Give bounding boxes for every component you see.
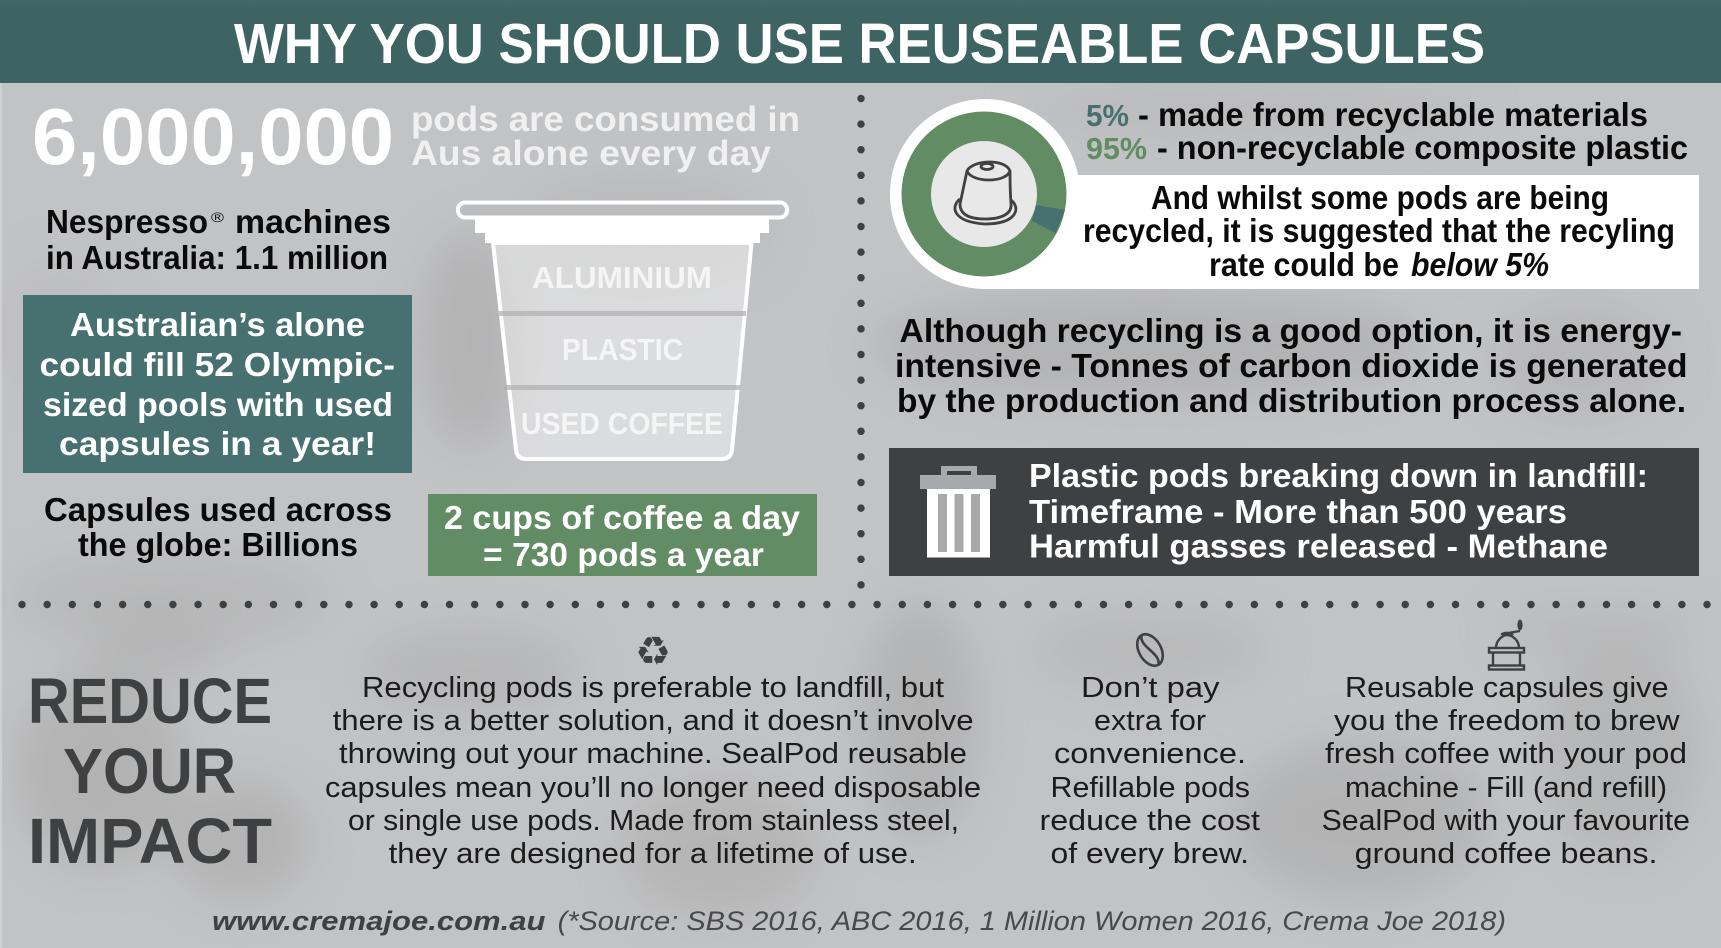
stat: 6,000,000 pods: Aus alone every day — [411, 134, 772, 173]
text: freedom column — [1322, 672, 1690, 870]
footer: source line — [212, 906, 1506, 936]
panel: recycling callout — [890, 96, 1699, 289]
panel: Olympic pools: Australian’s alone — [70, 306, 365, 343]
donut chart — [890, 99, 1080, 289]
diagram: capsule cross-section — [458, 202, 787, 459]
callout text: below 5% — [1411, 246, 1549, 283]
title: WHY YOU SHOULD USE REUSEABLE CAPSULES — [234, 12, 1485, 76]
panel: Olympic pools: capsules in a year! — [59, 425, 376, 462]
text: Nespresso machines: ® — [211, 209, 225, 225]
text: Nespresso machines: machines — [235, 203, 391, 240]
icon: coffee bean — [1132, 630, 1168, 670]
text: capsules globally: the globe: Billions — [78, 526, 358, 563]
label: aluminium: ALUMINIUM — [532, 260, 712, 295]
heading: reduce your impact: REDUCE — [28, 665, 272, 737]
layer dividers — [499, 311, 746, 390]
text: convenience column — [1040, 672, 1260, 870]
callout text — [1083, 179, 1675, 283]
callout text: rate could be — [1209, 246, 1399, 283]
text: recycling column: or single use pods. Made from stainless steel, — [348, 805, 959, 837]
text: Nespresso machines — [46, 203, 391, 276]
text: recycling column: they are designed for a lifetime of use. — [389, 838, 917, 870]
text: convenience column: Don’t pay — [1081, 672, 1220, 704]
icon: coffee grinder — [1489, 620, 1524, 670]
dotted divider: vertical — [857, 98, 865, 586]
title banner — [0, 0, 1721, 83]
text: recycling column: Recycling pods is preferable to landfill, but — [362, 672, 944, 704]
panel: 730 pods a year: 2 cups of coffee a day — [444, 499, 801, 536]
text: Nespresso machines: Nespresso — [46, 203, 208, 240]
text: energy-intensive recycling: Although recycling is a good option, it is energy- — [900, 312, 1682, 349]
icon: rubbish bin — [920, 466, 996, 558]
text: energy-intensive recycling — [895, 312, 1688, 419]
stat: 6,000,000 pods — [32, 92, 800, 181]
text: convenience column: Refillable pods — [1050, 772, 1250, 804]
callout text: And whilst some pods are being — [1151, 179, 1609, 216]
text: capsules globally: Capsules used across — [44, 491, 392, 528]
text: recycling column: throwing out your machine. SealPod reusable — [339, 738, 967, 770]
text: energy-intensive recycling: intensive - Tonnes of carbon dioxide is generated — [895, 347, 1688, 384]
text: freedom column: SealPod with your favourite — [1322, 805, 1690, 837]
panel: landfill: Plastic pods breaking down in landfill: — [1029, 457, 1648, 494]
capsule rim — [458, 202, 787, 218]
text: freedom column: fresh coffee with your pod — [1325, 738, 1687, 770]
stat: 6,000,000 pods: 6,000,000 — [32, 92, 394, 181]
dotted divider: horizontal — [22, 601, 1712, 608]
heading: reduce your impact — [28, 665, 272, 877]
text: recycling column: capsules mean you’ll no longer need disposable — [325, 772, 981, 804]
panel: Olympic pools — [23, 295, 412, 473]
text: recycling column — [325, 672, 981, 870]
capsule collar — [475, 217, 769, 243]
text: convenience column: convenience. — [1054, 738, 1246, 770]
panel: 730 pods a year: = 730 pods a year — [483, 536, 764, 573]
text: convenience column: of every brew. — [1050, 838, 1249, 870]
text: freedom column: Reusable capsules give — [1345, 672, 1668, 704]
text: convenience column: extra for — [1094, 705, 1206, 737]
panel: 730 pods a year — [428, 494, 817, 576]
icon: capsule — [955, 162, 1016, 224]
stat: 6,000,000 pods: pods are consumed in — [411, 100, 800, 139]
legend: 95%: - non-recyclable composite plastic — [1157, 129, 1688, 166]
white callout bar — [985, 175, 1699, 289]
text: recycling column: there is a better solution, and it doesn’t involve — [333, 705, 974, 737]
panel: landfill: Harmful gasses released - Methane — [1029, 528, 1608, 564]
label: used coffee: USED COFFEE — [521, 406, 723, 441]
text: freedom column: ground coffee beans. — [1355, 838, 1658, 870]
text: freedom column: machine - Fill (and refill) — [1345, 772, 1667, 804]
icon: recycling symbol: ♻ — [635, 629, 671, 675]
callout text: recycled, it is suggested that the recyling — [1083, 212, 1675, 249]
panel: Olympic pools: sized pools with used — [43, 386, 393, 423]
panel: landfill: Timeframe - More than 500 years — [1029, 493, 1567, 530]
panel: landfill — [889, 448, 1699, 576]
legend: 95%: 95% — [1086, 131, 1147, 166]
text: convenience column: reduce the cost — [1040, 805, 1260, 837]
heading: reduce your impact: YOUR — [63, 735, 236, 807]
legend: 5%: 5% — [1086, 98, 1129, 133]
legend: 5%: - made from recyclable materials — [1138, 96, 1648, 133]
text: energy-intensive recycling: by the production and distribution process alone. — [897, 382, 1686, 419]
text: capsules globally — [44, 491, 392, 563]
footer: source line: www.cremajoe.com.au — [212, 906, 546, 936]
panel: Olympic pools: could fill 52 Olympic- — [40, 346, 395, 383]
text: Nespresso machines: in Australia: 1.1 million — [46, 239, 388, 276]
capsule body — [493, 243, 752, 459]
footer: source line: (*Source: SBS 2016, ABC 2016, 1 Million Women 2016, Crema Joe 2018) — [558, 906, 1506, 936]
heading: reduce your impact: IMPACT — [28, 805, 272, 877]
text: freedom column: you the freedom to brew — [1334, 705, 1681, 737]
label: plastic: PLASTIC — [562, 332, 683, 367]
